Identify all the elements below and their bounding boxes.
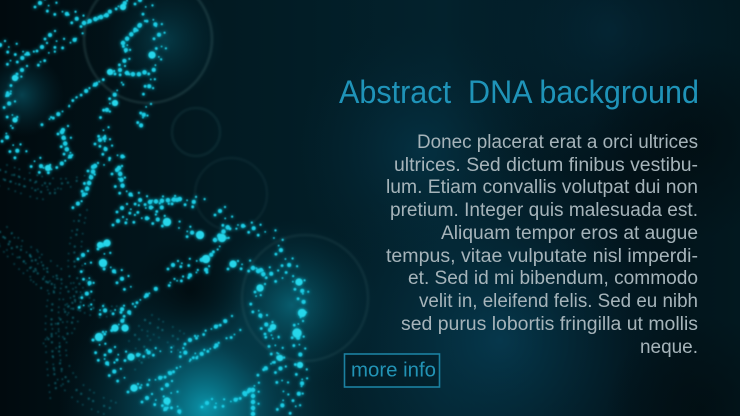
body text block: tempus, vitae vulputate nisl imperdi- (386, 246, 698, 267)
body text block: lum. Etiam convallis volutpat dui non (386, 177, 698, 198)
DNA helix particles (0, 0, 309, 416)
faint back strands (0, 165, 192, 414)
lens flare rings (84, 0, 368, 361)
body text block: velit in, eleifend felis. Sed eu nibh (419, 291, 698, 312)
bright clusters (62, 14, 268, 414)
more info button (344, 354, 440, 387)
body text block (386, 132, 698, 358)
body text block: et. Sed id mi bibendum, commodo (408, 268, 698, 289)
more info button: more info (351, 360, 436, 382)
body text block: sed purus lobortis fringilla ut mollis (401, 314, 698, 335)
body text block: Donec placerat erat a orci ultrices (417, 132, 698, 153)
body text block: neque. (640, 337, 698, 358)
body text block: Aliquam tempor eros at augue (441, 223, 698, 244)
body text block: pretium. Integer quis malesuada est. (390, 200, 698, 221)
title: Abstract DNA background (339, 74, 699, 110)
individual bright particles (12, 4, 306, 404)
main strands (0, 0, 309, 416)
body text block: ultrices. Sed dictum finibus vestibu- (394, 155, 698, 176)
